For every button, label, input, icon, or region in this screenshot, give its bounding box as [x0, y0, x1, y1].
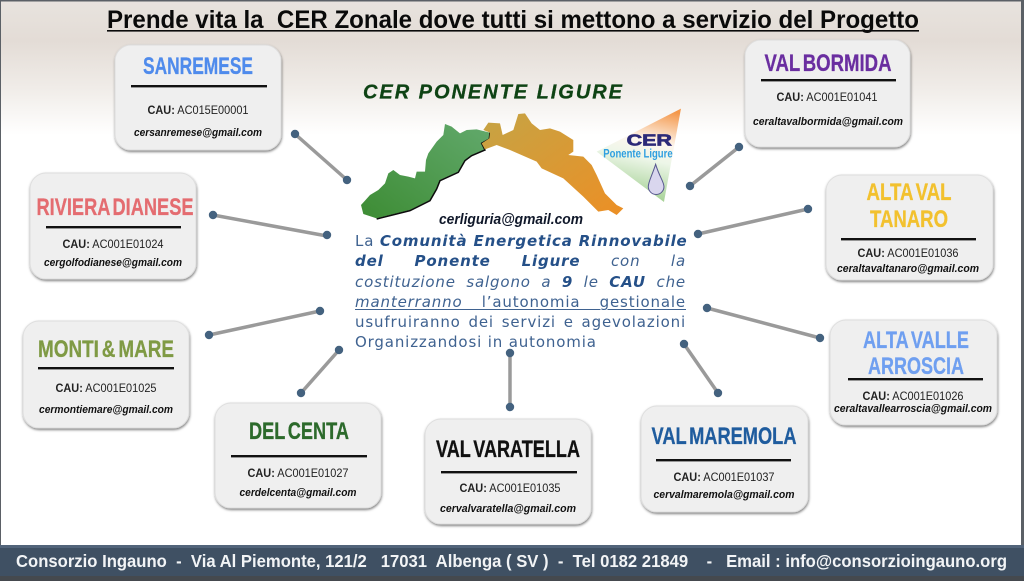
card: Val Maremola — [641, 406, 808, 512]
footer bar — [0, 545, 1024, 581]
card: Monti & Mare: cermontiemare@gmail.com — [39, 404, 173, 416]
connector: Val Maremola — [680, 340, 722, 397]
card: Del Centa: DEL CENTA — [249, 418, 349, 445]
card: Alta Val Tanaro: TANARO — [870, 206, 948, 233]
card: Val Varatella: VAL VARATELLA — [436, 436, 580, 463]
central description text: La Comunità Energetica Rinnovabile — [355, 232, 688, 250]
card: Alta Valle Arroscia: ARROSCIA — [868, 353, 964, 380]
connector: Sanremese — [291, 130, 351, 184]
map: coast shadow — [377, 133, 490, 219]
central description text: del Ponente Ligure con la — [355, 252, 686, 270]
card: Val Varatella: cervalvaratella@gmail.com — [440, 503, 576, 515]
connector: Monti e Mare — [205, 307, 324, 339]
card: Val Varatella — [425, 419, 591, 524]
central description text — [355, 232, 688, 351]
title: Prende vita la CER Zonale dove tutti si mettono a servizio del Progetto — [107, 6, 919, 34]
card: Riviera Dianese: CAU: AC001E01024 — [62, 239, 164, 251]
card: Val Bormida: ceraltavalbormida@gmail.com — [753, 116, 903, 128]
map: western green zone — [361, 124, 490, 218]
card: Del Centa: cerdelcenta@gmail.com — [240, 487, 357, 499]
card: Riviera Dianese: cergolfodianese@gmail.com — [44, 257, 182, 269]
card: Alta Val Tanaro: ALTA VAL — [866, 179, 952, 206]
card: Alta Val Tanaro — [826, 175, 993, 280]
email: cerliguria: cerliguria@gmail.com — [439, 212, 583, 228]
card: Alta Valle Arroscia: ceraltavallearroscia@gmail.com — [834, 403, 992, 415]
card: Riviera Dianese — [30, 173, 196, 279]
heading: CER Ponente Ligure: CER PONENTE LIGURE — [363, 82, 623, 104]
card: Monti & Mare: MONTI & MARE — [38, 336, 174, 363]
connector: Riviera Dianese — [209, 211, 331, 239]
central description text: usufruiranno dei servizi e agevolazioni — [355, 313, 686, 331]
card: Monti & Mare: CAU: AC001E01025 — [56, 383, 156, 395]
card: Val Maremola: cervalmaremola@gmail.com — [654, 489, 795, 501]
central description text: costituzione salgono a 9 le CAU che — [355, 273, 686, 291]
card: Sanremese: CAU: AC015E00001 — [148, 105, 248, 117]
card: Val Bormida: VAL BORMIDA — [764, 50, 892, 77]
card: Del Centa — [215, 403, 381, 508]
card: Alta Valle Arroscia — [830, 320, 997, 425]
connector: Del Centa — [297, 346, 343, 397]
card: Alta Valle Arroscia: CAU: AC001E01026 — [862, 391, 964, 403]
card: Sanremese — [115, 45, 281, 150]
map: eastern orange zone — [482, 113, 623, 215]
connector: Val Varatella — [506, 349, 514, 411]
card: Alta Val Tanaro: CAU: AC001E01036 — [858, 248, 958, 260]
card: Val Bormida: CAU: AC001E01041 — [776, 92, 878, 104]
card: Val Varatella: CAU: AC001E01035 — [460, 483, 560, 495]
card: Val Maremola: VAL MAREMOLA — [652, 423, 796, 450]
card: Del Centa: CAU: AC001E01027 — [248, 468, 348, 480]
card: Alta Val Tanaro: ceraltavaltanaro@gmail.com — [837, 263, 979, 275]
logo: CER Ponente Ligure triangle: Ponente Ligure — [603, 146, 673, 160]
logo: CER Ponente Ligure triangle — [597, 109, 681, 202]
card: Val Maremola: CAU: AC001E01037 — [674, 472, 774, 484]
connector: Alta Valle Arroscia — [703, 304, 824, 342]
connector: Alta Val Tanaro — [694, 205, 812, 238]
central description text: manterranno l’autonomia gestionale — [355, 293, 686, 311]
card: Monti & Mare — [23, 321, 189, 428]
card: Alta Valle Arroscia: ALTA VALLE — [863, 327, 969, 354]
connector: Val Bormida — [686, 143, 743, 190]
card: Sanremese: cersanremese@gmail.com — [134, 127, 262, 139]
map of Liguria — [361, 113, 623, 219]
card: Val Bormida — [745, 40, 910, 147]
card: Sanremese: SANREMESE — [143, 53, 253, 80]
card: Riviera Dianese: RIVIERA DIANESE — [36, 194, 194, 221]
central description text: Organizzandosi in autonomia — [355, 333, 597, 351]
logo: CER Ponente Ligure triangle: CER — [627, 132, 672, 149]
